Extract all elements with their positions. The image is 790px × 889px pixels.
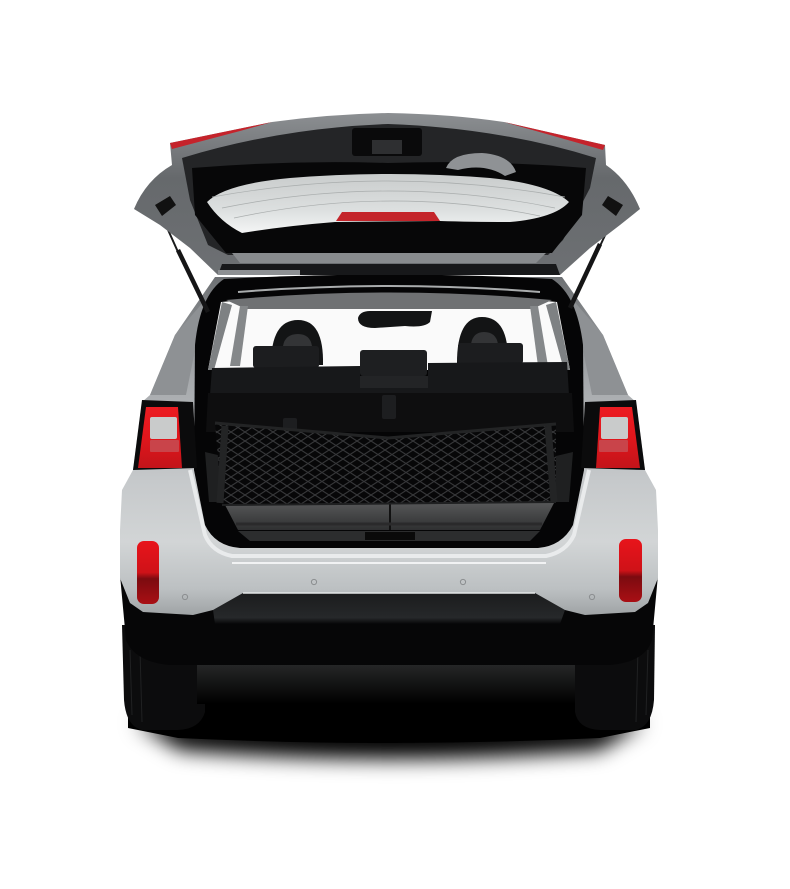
lower black bumper: [120, 575, 658, 665]
glass defroster lines: [212, 181, 565, 218]
cargo side wheel arches: [205, 452, 573, 502]
cargo opening: [194, 274, 584, 548]
rear-view mirror: [358, 311, 432, 328]
folded seat backs: [206, 362, 574, 432]
camera housing: [352, 128, 422, 156]
gas struts: [160, 212, 616, 312]
under-car area: [197, 664, 575, 704]
headrests: [253, 317, 523, 376]
red edge left: [170, 122, 272, 149]
lower strip: [232, 253, 546, 263]
red edge right: [504, 122, 605, 150]
handle: [446, 153, 516, 176]
body sensors and edge shading: [150, 300, 628, 600]
left tail lamp: [133, 400, 197, 470]
cargo net: [215, 423, 556, 505]
inner trim: [182, 124, 596, 255]
black glass surround: [192, 162, 586, 253]
high-mount stop lamp: [336, 212, 440, 221]
ground shadow: [128, 660, 650, 759]
cargo floor: [224, 503, 554, 541]
bumper reflectors: [137, 539, 642, 604]
rear window glass: [207, 174, 569, 233]
open tailgate: [134, 113, 640, 275]
rear tyres: [122, 625, 655, 730]
silver body: [120, 277, 658, 615]
hinge brackets: [155, 196, 176, 216]
right tail lamp: [581, 400, 645, 470]
